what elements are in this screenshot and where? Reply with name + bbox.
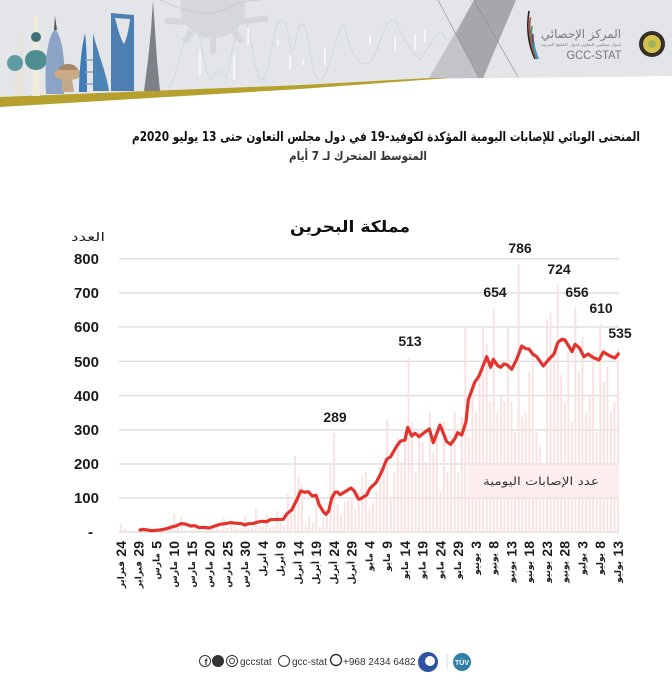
text: website handle: gcc-stat [292,657,327,668]
legend: daily cases label [468,465,619,497]
peak value labels: 786 [508,240,532,256]
chart watermark curves [168,18,446,88]
x axis month labels: مايو [383,553,393,572]
x axis month labels: مايو [401,561,411,580]
x axis date labels: 23 [539,541,555,557]
x axis month labels: أبريل [257,553,269,576]
x axis date labels: 14 [290,541,306,557]
footer contacts and certification logos [200,652,471,672]
x axis date labels: 3 [574,541,590,549]
peak value labels: 724 [547,261,571,277]
x axis date labels: 14 [397,541,413,557]
x axis date labels: 8 [486,541,502,549]
x axis month labels: مايو [436,561,446,580]
peak value labels: 289 [323,409,347,425]
y axis labels: 700 [74,285,99,302]
x axis date labels: 24 [113,541,129,557]
x axis date labels: 29 [344,541,360,557]
subtitle: المتوسط المتحرك لـ 7 أيام [289,148,427,164]
y axis title: العدد [71,230,105,244]
x axis month labels: يونيو [525,561,535,584]
x axis month labels: يونيو [490,553,500,576]
chart heading: مملكة البحرين [290,217,410,236]
icon: virus watermark [165,0,268,54]
icon: TUV logo: TÜV [455,658,469,667]
peak value labels [323,240,632,425]
x axis date labels: 8 [592,541,608,549]
icon: gulf city skyline [7,0,160,96]
x axis month labels: أبريل [310,561,322,584]
logo: GCC-STAT: لدول مجلس التعاون لدول الخليج العربية [541,42,621,47]
x axis date labels: 25 [220,541,236,557]
y axis labels [74,251,99,541]
x axis date labels: 5 [148,541,164,549]
x axis month labels: مارس [241,561,251,588]
logo: GCC-STAT [528,11,665,62]
y axis labels: 300 [74,422,99,439]
peak value labels: 656 [565,284,589,300]
x axis month labels: يونيو [508,561,518,584]
x axis month labels: مارس [188,561,198,588]
x axis month labels: مارس [224,561,234,588]
x axis month labels: يوليو [614,561,624,584]
x axis date labels: 30 [237,541,253,557]
y axis labels: 100 [74,490,99,507]
icon: social media [200,654,342,666]
x axis date labels: 24 [326,541,342,557]
x axis month labels: يونيو [561,561,571,584]
icon: quality logo [418,652,438,672]
y axis labels: 800 [74,251,99,268]
bars: daily cases [121,264,618,532]
x axis date labels: 24 [432,541,448,557]
x axis date labels: 28 [557,541,573,557]
y axis labels: 200 [74,456,99,473]
x axis month labels: فبراير [135,561,145,589]
footer contacts and certification logos: f [204,657,208,667]
x axis date labels: 19 [415,541,431,557]
logo: GCC-STAT: GCC-STAT [566,48,622,62]
x axis month labels: أبريل [275,553,287,576]
x axis date labels: 15 [184,541,200,557]
x axis date labels: 13 [610,541,626,557]
line: seven-day moving average [140,339,618,531]
x axis date labels: 4 [362,541,378,549]
x axis month labels: مارس [170,561,180,588]
legend: daily cases label: عدد الإصابات اليومية [483,475,599,488]
x axis date labels [113,541,626,557]
x axis date labels: 3 [468,541,484,549]
x axis date labels: 13 [504,541,520,557]
x axis date labels: 4 [255,541,271,549]
text: social handle: gccstat [240,657,272,668]
icon: GCC emblem [639,31,665,57]
peak value labels: 654 [483,284,507,300]
y axis labels: 500 [74,354,99,371]
y axis labels: 600 [74,319,99,336]
x axis month labels: مارس [206,561,216,588]
logo: GCC-STAT: المركز الإحصائي [541,27,621,42]
peak value labels: 513 [398,333,422,349]
x axis date labels: 10 [166,541,182,557]
x axis date labels: 18 [521,541,537,557]
x axis date labels: 20 [202,541,218,557]
x axis month labels: أبريل [292,561,304,584]
x axis month labels: مايو [366,553,376,572]
y axis labels: - [88,524,93,541]
x axis date labels: 9 [273,541,289,549]
x axis month labels [117,553,624,589]
x axis date labels: 19 [308,541,324,557]
x axis month labels: مايو [454,561,464,580]
x axis date labels: 29 [450,541,466,557]
x axis month labels: أبريل [346,561,358,584]
x axis date labels: 29 [131,541,147,557]
y axis labels: 400 [74,388,99,405]
icon: TUV logo [453,653,471,671]
x axis month labels: يونيو [472,553,482,576]
gold ribbon [0,78,450,107]
x axis month labels: مايو [419,561,429,580]
x axis month labels: فبراير [117,561,127,589]
diagonal grey band [429,0,518,78]
chart: daily cases and moving average [119,259,619,532]
peak value labels: 535 [608,325,632,341]
x axis month labels: مارس [152,553,162,580]
x axis month labels: يونيو [543,561,553,584]
x axis date labels: 9 [379,541,395,549]
icon: coloured ribbon [528,11,538,59]
x axis month labels: أبريل [328,561,340,584]
header banner [0,0,672,107]
peak value labels: 610 [589,300,613,316]
x axis month labels: يوليو [596,553,606,576]
text: phone number: +968 2434 6482 [343,657,416,668]
x axis month labels: يوليو [578,553,588,576]
